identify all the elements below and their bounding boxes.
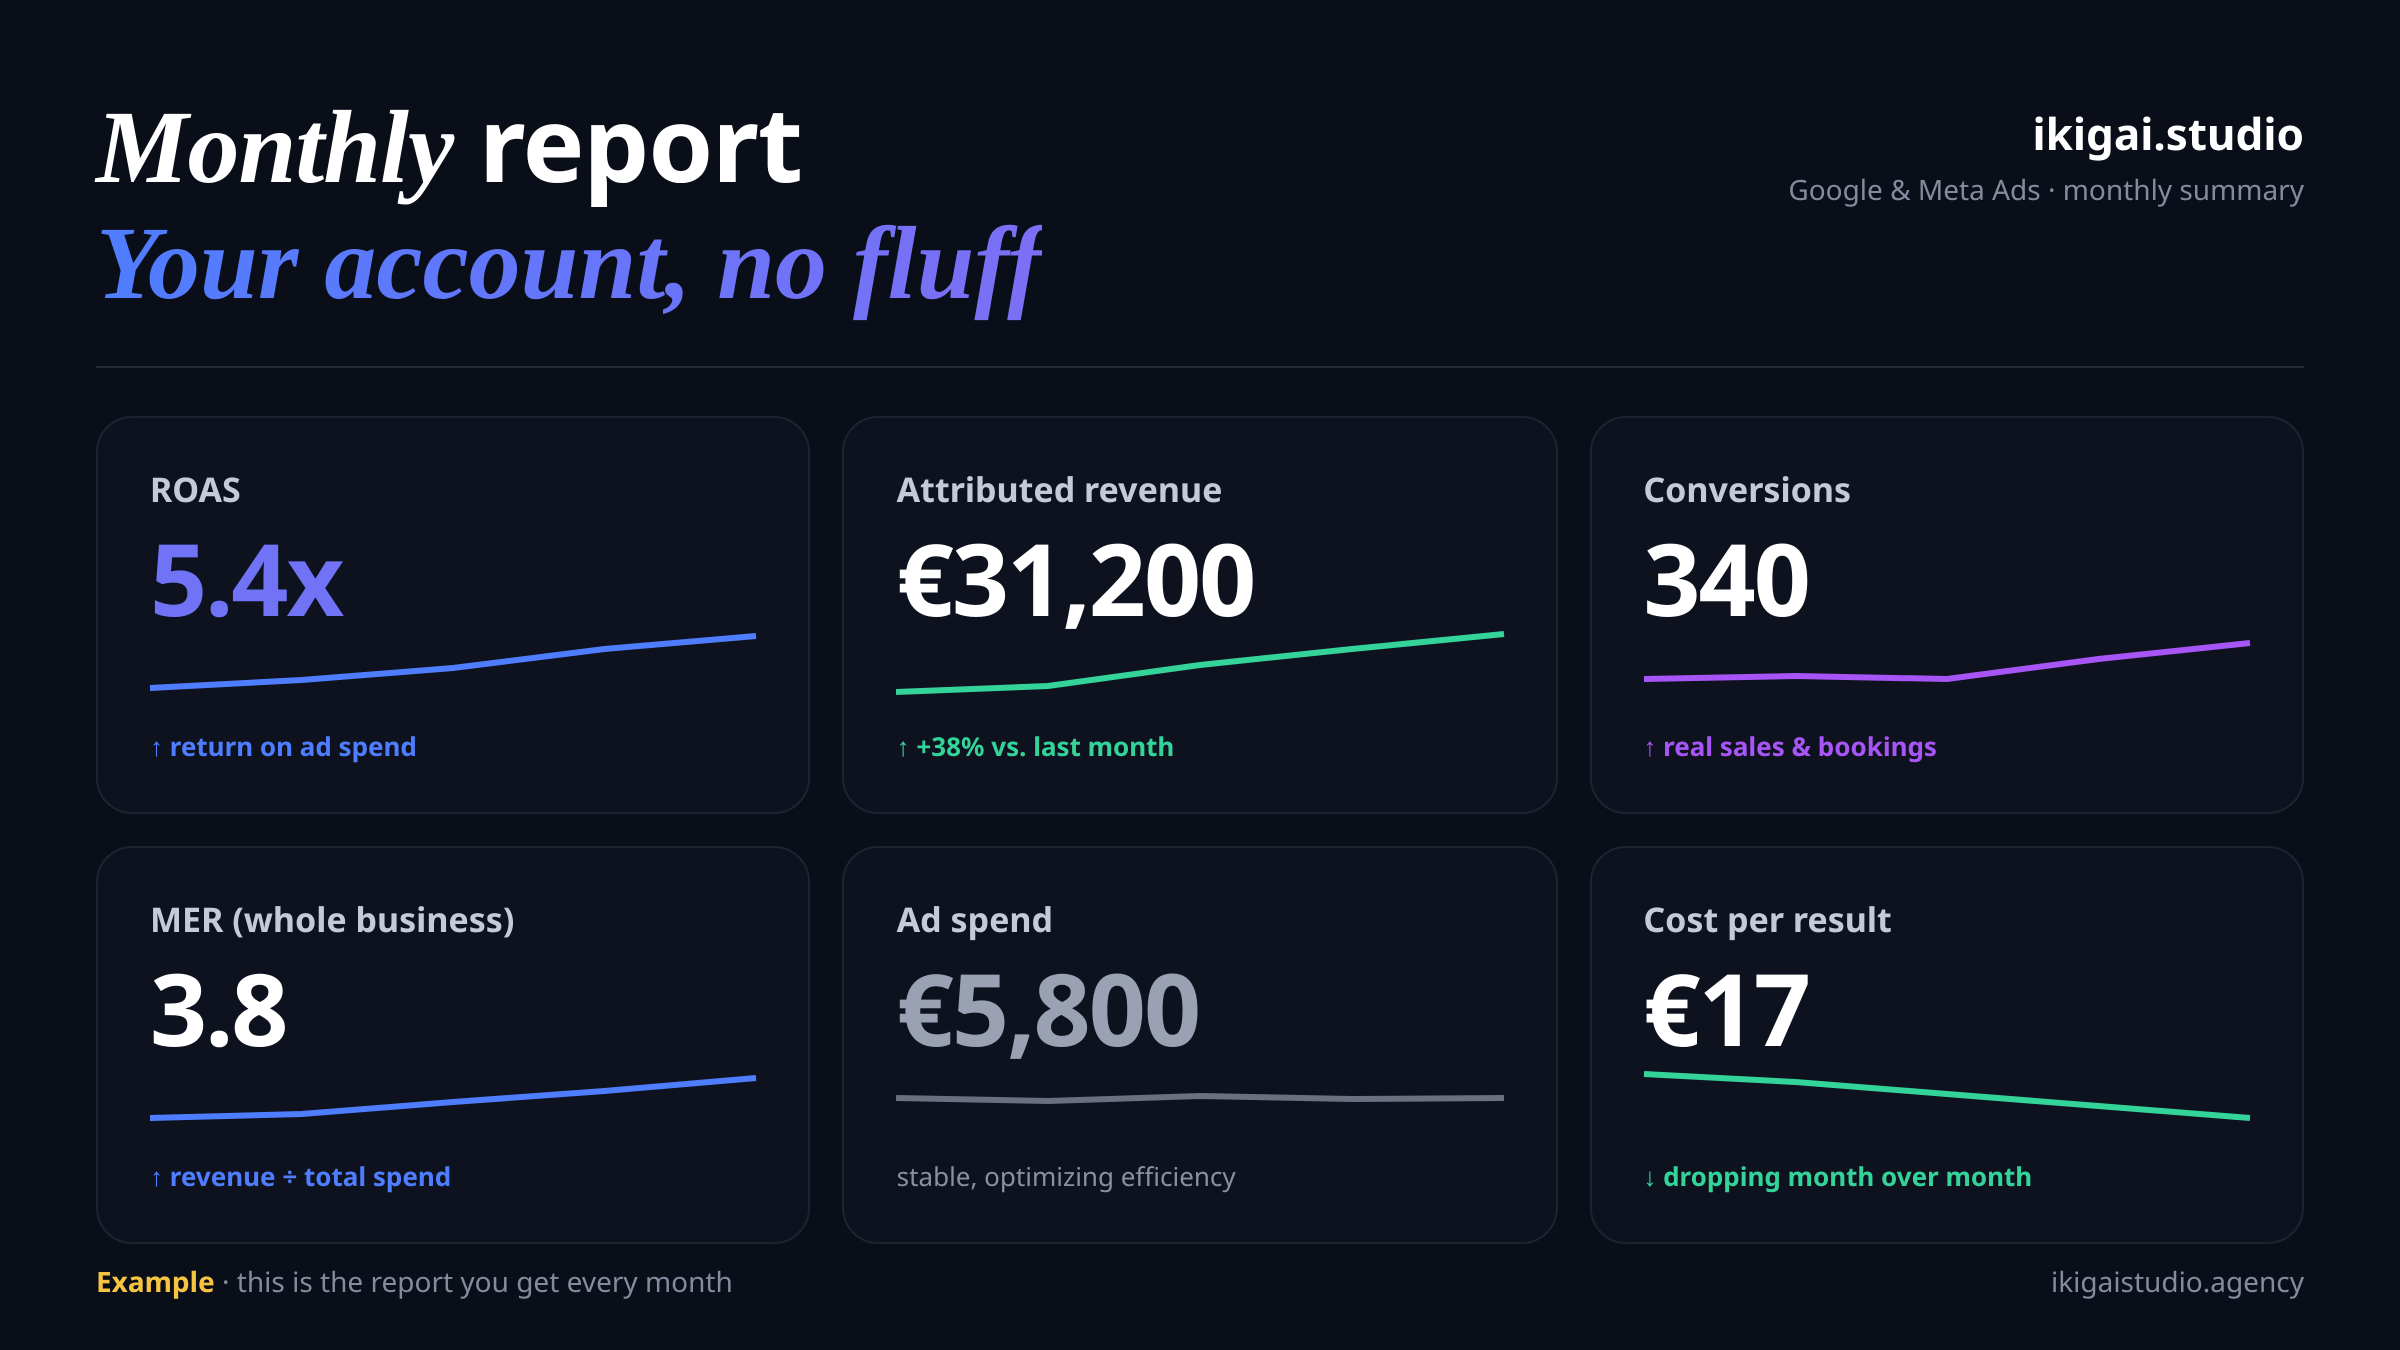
value: ROAS: 5.4x — [150, 510, 342, 646]
label: Ad spend: Ad spend — [897, 896, 1053, 942]
note: Cost per result: ↓ dropping month over month — [1643, 1158, 2032, 1194]
footer note: Example · this is the report you get every month — [96, 1263, 733, 1301]
note: Conversions: ↑ real sales & bookings — [1643, 728, 1937, 764]
footer link: ikigaistudio.agency — [2051, 1263, 2304, 1301]
panel: Attributed revenue — [842, 416, 1558, 814]
label: Attributed revenue: Attributed revenue — [897, 466, 1222, 512]
sparkline: Attributed revenue — [896, 631, 1504, 695]
sparkline: ROAS — [150, 633, 756, 691]
label: MER: MER (whole business) — [150, 896, 514, 942]
note: MER: ↑ revenue ÷ total spend — [150, 1158, 451, 1194]
panel: Cost per result — [1590, 846, 2304, 1244]
value: MER: 3.8 — [150, 940, 286, 1076]
value: Ad spend: €5,800 — [897, 940, 1199, 1076]
brand subtitle: Google & Meta Ads · monthly summary — [1788, 171, 2304, 209]
panel: ROAS — [96, 416, 810, 814]
title line 2: Your account, no fluff — [96, 206, 1042, 321]
note: ROAS: ↑ return on ad spend — [150, 728, 417, 764]
value: Attributed revenue: €31,200 — [897, 510, 1254, 646]
sparkline: MER — [150, 1075, 756, 1121]
title line 1: Monthly report — [96, 72, 802, 213]
sparkline: Cost per result — [1644, 1071, 2250, 1121]
value: Cost per result: €17 — [1643, 940, 1809, 1076]
label: Cost per result: Cost per result — [1643, 896, 1892, 942]
title — [94, 72, 1042, 321]
note: Ad spend: stable, optimizing efficiency — [897, 1158, 1236, 1194]
panel: Conversions — [1590, 416, 2304, 814]
note: Attributed revenue: ↑ +38% vs. last month — [897, 728, 1174, 764]
panel: MER — [96, 846, 810, 1244]
sparkline: Ad spend — [896, 1093, 1504, 1104]
brand name: ikigai.studio — [2032, 103, 2304, 163]
label: Conversions: Conversions — [1643, 466, 1851, 512]
value: Conversions: 340 — [1643, 510, 1809, 646]
label: ROAS: ROAS — [150, 466, 241, 512]
sparkline: Conversions — [1644, 640, 2250, 682]
panel: Ad spend — [842, 846, 1558, 1244]
